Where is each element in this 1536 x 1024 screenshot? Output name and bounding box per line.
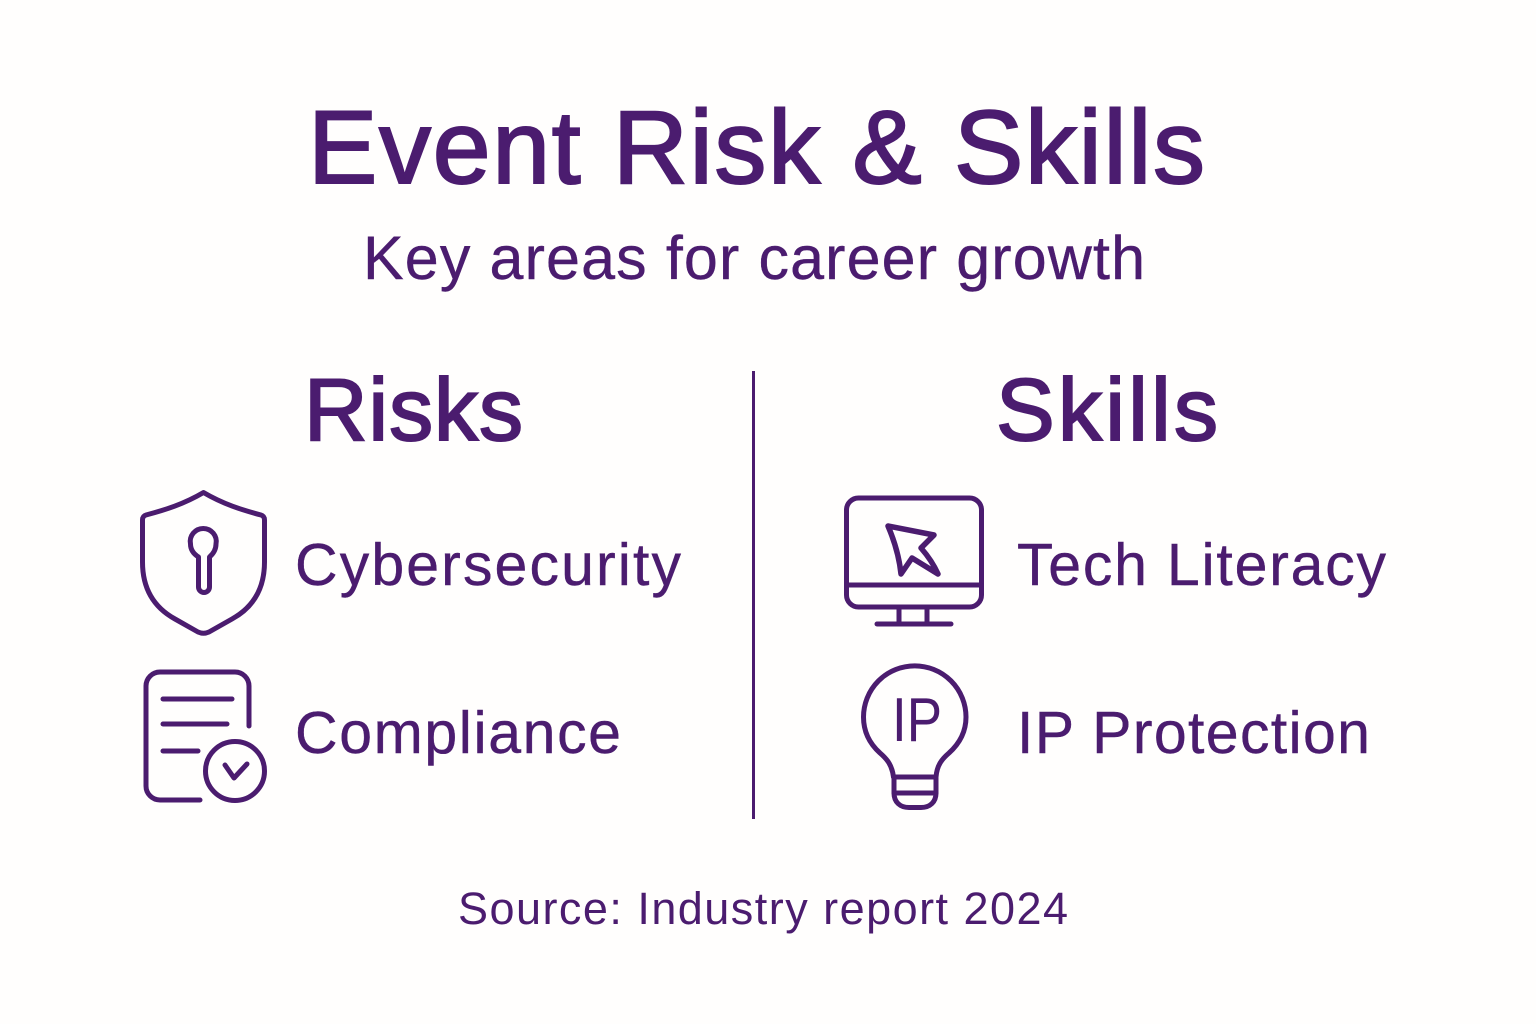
- heading: skills: Skills: [996, 360, 1218, 459]
- icon: shield with keyhole: [142, 492, 264, 633]
- center divider: [752, 371, 755, 819]
- icon: light bulb with IP: [864, 666, 966, 808]
- icon: document with check: [146, 672, 264, 800]
- source note: Source: Industry report 2024: [458, 883, 1068, 934]
- label: compliance: Compliance: [295, 700, 621, 766]
- title: Event Risk & Skills: [308, 90, 1205, 206]
- label: tech literacy: Tech Literacy: [1017, 532, 1386, 598]
- panel: skills: [846, 360, 1386, 808]
- panel: risks: [142, 360, 682, 800]
- heading: risks: Risks: [304, 360, 523, 459]
- icon text: IP: IP: [892, 686, 942, 755]
- label: cybersecurity: Cybersecurity: [295, 532, 682, 598]
- subtitle: Key areas for career growth: [363, 224, 1145, 292]
- icon: monitor with cursor: [846, 498, 982, 624]
- label: ip protection: IP Protection: [1017, 700, 1370, 766]
